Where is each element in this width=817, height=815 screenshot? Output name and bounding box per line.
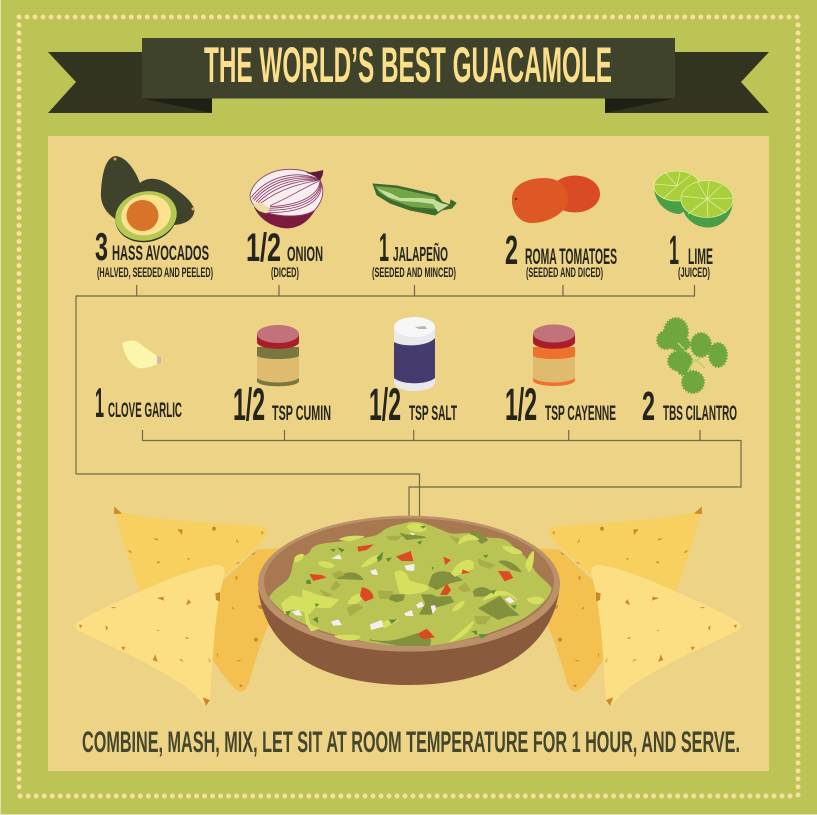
guacamole chunks: dark green	[337, 533, 521, 645]
guacamole chunks: olive	[320, 536, 495, 624]
label: 1/2 tsp cayenne	[505, 379, 616, 430]
bowl rim	[258, 516, 560, 652]
bowl of guacamole	[258, 516, 560, 685]
text: CLOVE GARLIC	[108, 399, 182, 422]
icon: cumin jar	[257, 325, 299, 386]
label: 1/2 tsp cayenne: 1/2	[505, 379, 537, 430]
icon: avocados	[101, 156, 194, 248]
label: 1/2 onion: (DICED)	[271, 264, 299, 280]
label: 1 lime	[669, 227, 713, 280]
label: 1 clove garlic	[95, 379, 182, 426]
guacamole mass	[269, 522, 552, 646]
icon: salt shaker	[394, 317, 435, 391]
label: 3 Hass avocados: HASS AVOCADOS	[112, 242, 209, 265]
label: 1/2 onion: ONION	[287, 243, 323, 266]
label: 1 lime: (JUICED)	[678, 264, 710, 280]
label: 2 Roma tomatoes	[505, 227, 617, 280]
guacamole chunks: white onion	[292, 533, 515, 630]
label: 1/2 tsp cumin	[233, 379, 331, 430]
title banner	[48, 37, 769, 113]
icon: cilantro	[657, 318, 727, 393]
panel: recipe background	[48, 136, 769, 771]
text: ROMA TOMATOES	[525, 244, 617, 269]
label: 1/2 tsp salt: 1/2	[369, 379, 401, 430]
label: 2 tbs cilantro: 2	[642, 383, 655, 429]
label: 1 clove garlic: 1	[95, 379, 104, 426]
label: 2 Roma tomatoes: (SEEDED AND DICED)	[526, 264, 603, 280]
icon: limes	[654, 171, 733, 228]
label: 1/2 tsp cumin: TSP CUMIN	[272, 401, 331, 425]
icon: jalapeno	[373, 184, 456, 215]
guacamole chunks: light avocado	[282, 524, 543, 642]
tortilla chips: right	[536, 507, 741, 706]
icon: garlic clove	[122, 341, 161, 368]
ribbon left tail	[48, 52, 212, 113]
label: 1/2 onion: 1/2	[246, 226, 281, 270]
label: 1 jalapeno: (SEEDED AND MINCED)	[372, 264, 456, 280]
ribbon right tail	[605, 52, 769, 113]
text: TSP SALT	[409, 401, 457, 425]
tortilla chips: left	[75, 507, 280, 706]
label: 1 lime: 1	[669, 227, 679, 273]
label: 1/2 onion	[246, 226, 323, 280]
text: LIME	[688, 244, 713, 269]
connector lines	[76, 285, 741, 516]
guacamole chunks: red tomato	[309, 544, 513, 639]
label: 1/2 tsp cumin: 1/2	[233, 379, 265, 430]
bowl body	[258, 590, 559, 685]
icon: onion	[250, 169, 323, 228]
label: 3 Hass avocados	[95, 226, 213, 280]
label: 3 Hass avocados: (HALVED, SEEDED AND PEELED)	[97, 264, 213, 280]
icon: cayenne jar	[533, 324, 575, 386]
text: TSP CAYENNE	[545, 401, 616, 425]
label: 1 jalapeno: 1	[379, 226, 389, 270]
label: 2 Roma tomatoes: 2	[505, 227, 518, 273]
icon: tomatoes	[512, 176, 600, 223]
label: 1 jalapeno	[372, 226, 456, 280]
label: 2 tbs cilantro	[642, 383, 737, 429]
label: 3 Hass avocados: 3	[95, 226, 108, 269]
label: 1 jalapeno: JALAPEÑO	[393, 243, 448, 266]
guacamole chunks: herb flecks	[285, 526, 517, 639]
